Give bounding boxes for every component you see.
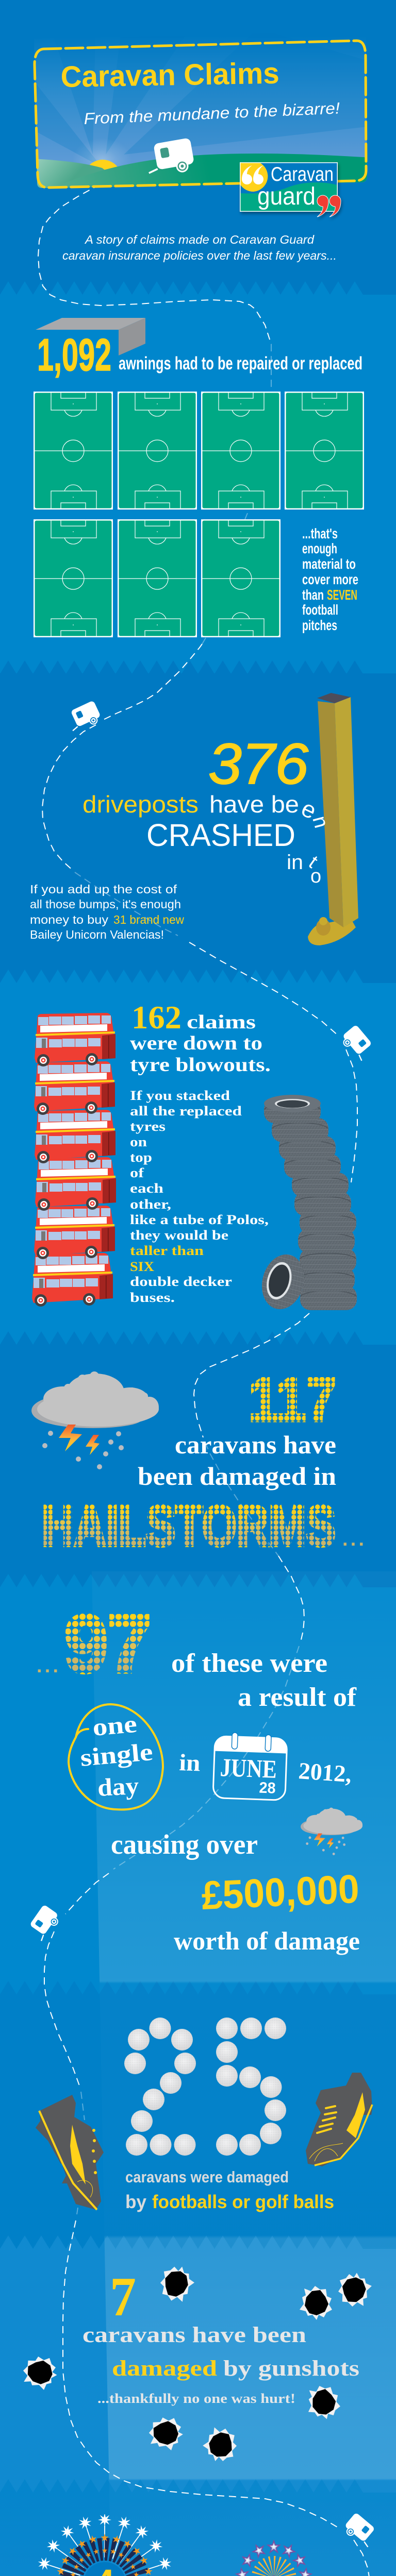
icon: caravan [65,700,103,734]
intro text: A story of claims made on Caravan Guard [84,233,315,246]
year: 2012, [298,1757,353,1787]
caption: a result of [238,1683,357,1712]
pitches caption [302,526,358,633]
icon: drive post [308,693,358,945]
bullet holes [21,2261,373,2466]
dashed yellow frame [35,41,366,188]
comparison text [130,1088,269,1305]
cost note: money to buy [30,913,109,926]
headline: tyre blowouts. [130,1054,271,1076]
intro text: caravan insurance policies over the last few years... [62,249,337,262]
headline: were down to [130,1032,262,1054]
one single day: one [91,1710,138,1741]
panel: hailstorms [31,1365,364,1558]
icon: right football boot [306,2073,372,2166]
comparison text: double decker [130,1274,232,1289]
comparison text: other, [130,1197,171,1212]
cost note: If you add up the cost of [30,883,177,896]
caption: caravans have [175,1430,336,1459]
purple star firework [236,2541,312,2576]
number 97: 97 [64,1599,151,1689]
logo: Caravan Guard: Caravan [271,163,334,185]
comparison text: taller than [130,1243,204,1258]
causing over: causing over [111,1829,258,1860]
icon: calendar [213,1732,287,1800]
caption [138,1430,336,1490]
panel: tyre blowouts [32,999,357,1314]
pitches caption: enough [302,540,337,556]
caption: in [287,851,303,874]
comparison text: each [130,1181,164,1196]
amount: £500,000 [201,1866,360,1918]
cost note [30,883,184,941]
caption: by gunshots [223,2357,359,2381]
logo: Caravan Guard: guard [257,183,316,210]
bus stack [32,1013,116,1307]
icon: calendar: JUNE [220,1753,277,1784]
cost note: 31 brand new [113,913,184,926]
comparison text: top [130,1150,152,1165]
caption: caravans have been [82,2323,306,2347]
pitches caption: than [302,587,324,603]
caption [125,2168,334,2212]
pitches caption: SEVEN [327,587,357,603]
number 1,092: 1,092 [37,329,111,380]
dashed caravan route [38,167,369,2576]
comparison text: If you stacked [130,1088,230,1103]
caption: caravans were damaged [125,2168,289,2186]
icon: caravan [26,1904,62,1943]
icon: caravan [339,1024,376,1063]
ellipsis: ... [37,1655,58,1677]
pitches caption: football [302,602,338,618]
caption: been damaged in [138,1462,336,1490]
comparison text: SIX [130,1259,154,1274]
comparison text: all the replaced [130,1104,242,1118]
comparison text: they would be [130,1228,228,1243]
caption: ...thankfully no one was hurt! [97,2391,295,2406]
panel: header card [33,39,367,189]
panel: footballs and golf balls [36,2018,372,2212]
caption: driveposts [82,791,199,818]
cost note: Bailey Unicorn Valencias! [30,928,164,941]
one single day: single [79,1738,154,1772]
tyre stack [256,1095,357,1314]
subtitle: From the mundane to the bizarre! [84,99,340,128]
pitches caption: material to [302,556,356,572]
pitches caption: ...that's [302,526,338,541]
caption: damaged [112,2357,217,2381]
caption: have be [209,791,299,818]
caption: by [125,2191,146,2212]
caption [82,2323,359,2406]
football pitches [34,392,364,637]
headline [130,1011,271,1076]
icon: small storm cloud [301,1808,362,1855]
caption: of these were [171,1649,327,1678]
caption [82,791,333,887]
caption: n [308,814,333,831]
grey awning block [36,318,145,355]
sky with sun rays [34,46,367,188]
pitches caption: cover more [302,571,358,587]
number 376: 376 [208,732,308,796]
title: Caravan Claims [60,57,279,94]
caption: t [305,852,322,873]
caption: o [310,866,321,887]
panel: driveposts [30,693,358,945]
main firework with number [35,2513,175,2576]
panel: awnings [34,318,364,637]
logo: Caravan Guard [240,162,341,217]
panel: one single day [37,1599,362,1955]
hand drawn circle [69,1704,163,1809]
number 25 in golf balls [124,2018,286,2156]
intro text [62,233,337,262]
headline: claims [187,1011,256,1033]
cost note: all those bumps, it's enough [30,897,181,911]
icon: left football boot [36,2095,104,2210]
caption: e [298,794,321,824]
comparison text: buses. [130,1290,175,1305]
panel: fireworks [38,2514,312,2576]
comparison text: like a tube of Polos, [130,1212,269,1227]
one single day: in [179,1749,201,1776]
icon: storm cloud [31,1371,159,1469]
worth of damage: worth of damage [174,1926,360,1955]
caption: CRASHED [146,818,295,853]
ellipsis: ... [342,1529,364,1550]
caption [171,1649,357,1712]
comparison text: tyres [130,1119,166,1134]
one single day: day [97,1772,139,1802]
panel: gunshots [21,2261,373,2466]
comparison text: on [130,1134,147,1149]
number 162: 162 [131,999,182,1036]
icon: caravan [341,2512,380,2550]
icon: caravan [144,138,195,178]
number 117: 117 [249,1365,336,1434]
icon: calendar: 28 [259,1780,276,1797]
pitches caption: pitches [302,617,337,633]
one single day [79,1710,201,1802]
comparison text: of [130,1165,144,1180]
caption: footballs or golf balls [152,2191,334,2212]
number 7: 7 [110,2266,136,2328]
